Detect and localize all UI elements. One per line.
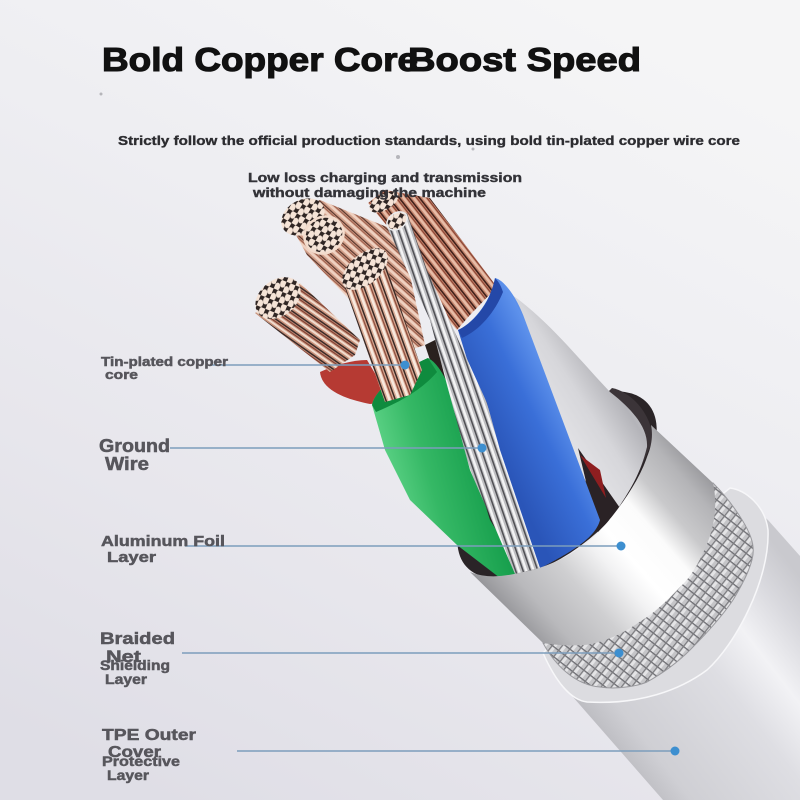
- ground wire strands: [387, 213, 540, 574]
- callout: TPE outer cover protective layer: Layer: [107, 767, 150, 783]
- strand end: top right: [366, 187, 402, 217]
- callout: tin-plated copper core: Tin-plated copper: [101, 354, 228, 369]
- callout: ground wire: [99, 436, 486, 474]
- copper bundle: upper left: [285, 200, 425, 355]
- secondary text: Low loss charging and transmission: [248, 170, 522, 185]
- callout: tin-plated copper core: [101, 354, 410, 382]
- callout: TPE outer cover protective layer: Protective: [102, 753, 180, 769]
- callout: TPE outer cover protective layer: [102, 727, 680, 783]
- subtitle: Strictly follow the official production standards, using bold tin-plated copper wire core: [118, 133, 740, 148]
- tube interior: [425, 357, 689, 613]
- dark wedge with red wire inside tube: [578, 448, 620, 532]
- secondary text: [248, 170, 522, 200]
- inner foil sleeve: [498, 286, 647, 520]
- strand end: upper left front: [298, 209, 350, 261]
- callout: aluminum foil layer: [101, 533, 626, 566]
- callout: aluminum foil layer: Aluminum Foil: [101, 533, 225, 550]
- strand end: ground: [383, 208, 411, 234]
- callout: TPE outer cover protective layer: TPE Outer: [102, 727, 196, 744]
- tube front: [470, 425, 715, 645]
- callout: TPE outer cover protective layer: Cover: [108, 744, 161, 761]
- green wire: [372, 358, 522, 578]
- copper bundle: left: [255, 283, 360, 372]
- copper bundle: top right: [368, 190, 497, 330]
- callout: ground wire: Ground: [99, 436, 170, 456]
- cable: TPE outer cover: [543, 488, 800, 800]
- callout: aluminum foil layer: Layer: [107, 549, 156, 566]
- callout: braided net shielding layer: [100, 629, 624, 687]
- secondary text: without damaging the machine: [252, 185, 486, 200]
- callout: braided net shielding layer: Layer: [105, 671, 148, 687]
- blue wire: [458, 278, 600, 570]
- decorative flecks: [100, 92, 474, 159]
- callout: ground wire: Wire: [105, 454, 149, 474]
- callout: braided net shielding layer: Net: [106, 647, 141, 666]
- strand end: upper left back: [275, 191, 331, 243]
- red wire: [320, 360, 392, 404]
- copper bundle: front: [343, 248, 422, 402]
- title: [102, 41, 641, 78]
- title: Boost Speed: [408, 41, 641, 78]
- title: Bold Copper Core: [102, 41, 418, 78]
- strand end: left: [247, 268, 309, 328]
- dark gap beside wires: [425, 335, 455, 390]
- callout: braided net shielding layer: Shielding: [100, 657, 170, 673]
- illustration: cable cross-section: [247, 187, 800, 800]
- cable: braided knurl ring: [543, 483, 753, 688]
- callout: braided net shielding layer: Braided: [100, 629, 175, 648]
- strand end: front: [335, 240, 395, 298]
- callout: tin-plated copper core: core: [105, 367, 138, 382]
